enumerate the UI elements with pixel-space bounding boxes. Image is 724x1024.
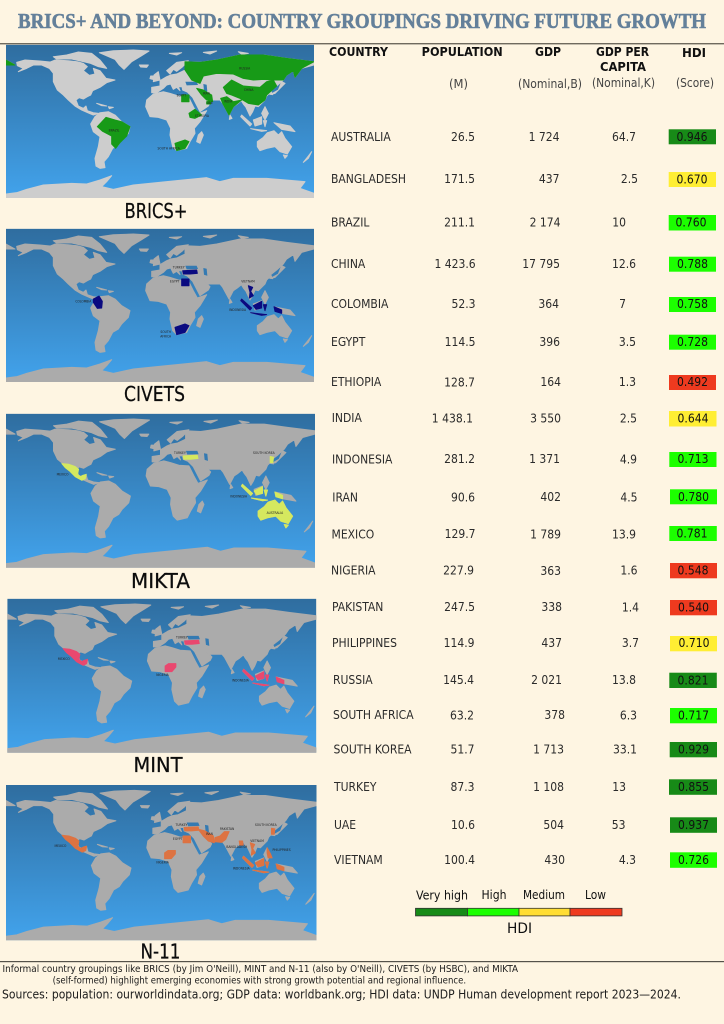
row: Vietnam: 4.3 xyxy=(619,853,636,867)
row: Indonesia: 4.9 xyxy=(620,452,637,466)
panel: N-11 map: NIGERIA xyxy=(156,860,170,864)
panel: MINT map: INDONESIA xyxy=(232,679,250,683)
row: Nigeria: 227.9 xyxy=(443,564,474,578)
text block: sources: Sources: population: ourworldindata.org; GDP data: worldbank.org; HDI data: UNDP Human development report 2023—2024. xyxy=(2,988,681,1002)
panel: MIKTA map: SOUTH KOREA xyxy=(253,451,276,455)
row: Brazil: 211.1 xyxy=(444,216,475,230)
row: Egypt: 3.5 xyxy=(619,335,636,349)
row: UAE: UAE xyxy=(334,818,356,832)
panel: CIVETS map: AFRICA xyxy=(160,334,172,338)
legend: HDI scale: Very high xyxy=(416,888,468,902)
panel: N-11 map: EGYPT xyxy=(173,837,183,841)
panel: BRICS+ map: SOUTH AFRICA xyxy=(157,146,181,150)
row: Turkey xyxy=(333,779,717,795)
row: India: 2.5 xyxy=(620,412,637,426)
row: Ethiopia xyxy=(331,375,716,390)
table header: (Score) xyxy=(676,76,714,90)
row: China: 1 423.6 xyxy=(434,257,476,271)
panel: N-11 map: VIETNAM xyxy=(250,839,264,843)
row: Colombia: COLOMBIA xyxy=(331,297,389,311)
row: Iran: IRAN xyxy=(332,490,358,504)
row: Brazil: BRAZIL xyxy=(331,216,369,230)
panel: MINT map: TURKEY xyxy=(176,636,188,640)
panel: BRICS+ map: IRAN xyxy=(203,91,210,95)
row: Mexico: MEXICO xyxy=(332,528,374,542)
row: Indonesia: 281.2 xyxy=(444,452,475,466)
row: Australia: 64.7 xyxy=(612,130,636,144)
row: Bangladesh: 2.5 xyxy=(621,172,638,186)
row: Nigeria: 363 xyxy=(540,564,561,578)
row: South Korea: 33.1 xyxy=(613,742,637,756)
row: Russia: 2 021 xyxy=(531,673,562,687)
panel: CIVETS map: EGYPT xyxy=(170,280,180,284)
row: Australia: 26.5 xyxy=(451,130,475,144)
row: Iran: 0.780 xyxy=(678,490,709,504)
panel: BRICS+ map: RUSSIA xyxy=(239,66,251,70)
row: Iran: 90.6 xyxy=(451,490,475,504)
panel: MINT map xyxy=(7,599,316,753)
row: Egypt: 114.5 xyxy=(445,335,476,349)
panel: MIKTA map xyxy=(6,414,315,568)
row: Australia: 0.946 xyxy=(677,130,708,144)
heading: N-11: N-11 xyxy=(140,940,180,964)
row: Australia: 1 724 xyxy=(529,130,560,144)
panel: N-11 map: BANGLADESH xyxy=(226,845,247,849)
panel: MIKTA map: MEXICO xyxy=(57,472,69,476)
table header: CAPITA xyxy=(600,60,647,74)
panel: N-11 map: PAKISTAN xyxy=(220,827,234,831)
row: Iran: 402 xyxy=(540,490,561,504)
panel: MINT map: MEXICO xyxy=(58,657,70,661)
row: South Korea xyxy=(334,742,717,757)
row: Bangladesh: 0.670 xyxy=(677,172,708,186)
table header: GDP PER xyxy=(596,45,650,59)
row: Turkey: 87.3 xyxy=(450,780,474,794)
row: Vietnam xyxy=(334,852,717,868)
row: UAE: 0.937 xyxy=(678,818,709,832)
row: India: 3 550 xyxy=(530,412,561,426)
row: South Africa: 0.717 xyxy=(678,708,709,722)
heading: BRICS+: BRICS+ xyxy=(124,199,188,223)
row: Colombia: 52.3 xyxy=(451,297,476,311)
row: China: 0.788 xyxy=(677,257,708,271)
row: India: 0.644 xyxy=(678,412,709,426)
row: Egypt: 0.728 xyxy=(677,335,708,349)
panel: N-11 map: SOUTH KOREA xyxy=(255,823,278,827)
row: Mexico: 129.7 xyxy=(445,527,476,541)
row: Nigeria: NIGERIA xyxy=(331,564,376,578)
panel: N-11 map: IRAN xyxy=(206,832,213,836)
panel: N-11 map: MEXICO xyxy=(54,844,67,848)
row: Iran: 4.5 xyxy=(620,490,638,504)
row: UAE xyxy=(334,817,717,833)
panel: MINT map: NIGERIA xyxy=(156,673,170,677)
legend: HDI scale: HDI xyxy=(507,921,532,937)
panel: CIVETS map xyxy=(6,229,314,382)
row: Nigeria xyxy=(331,563,717,578)
row: Ethiopia: 0.492 xyxy=(677,375,708,389)
row: Russia xyxy=(333,673,717,688)
panel: BRICS+ map: INDIA xyxy=(224,100,233,104)
table header: (Nominal,K) xyxy=(592,76,655,90)
row: Pakistan: 0.540 xyxy=(678,600,709,614)
legend: HDI scale xyxy=(416,888,622,937)
row: Philippines: 0.710 xyxy=(679,636,710,650)
panel: MIKTA map: TURKEY xyxy=(174,451,186,455)
row: Turkey: 13 xyxy=(612,780,626,794)
panel: N-11 map xyxy=(6,785,316,940)
table header: GDP xyxy=(535,45,561,59)
row: Brazil: 10 xyxy=(612,216,626,230)
row: Mexico: 0.781 xyxy=(677,526,707,540)
row: South Africa: 63.2 xyxy=(450,708,474,722)
row: Colombia: 364 xyxy=(538,297,559,311)
panel: CIVETS map: TURKEY xyxy=(173,266,185,270)
row: South Africa: 378 xyxy=(544,708,565,722)
panel: N-11 map: PHILIPPINES xyxy=(272,848,291,852)
row: South Africa: SOUTH AFRICA xyxy=(333,708,414,722)
row: Brazil: 0.760 xyxy=(676,216,707,230)
panel: BRICS+ map xyxy=(6,45,314,198)
row: Nigeria: 0.548 xyxy=(678,564,709,578)
panel: BRICS+ map: BRAZIL xyxy=(109,129,120,133)
row: Egypt xyxy=(331,335,716,350)
row: Philippines: PHILIPPINES xyxy=(332,636,397,650)
row: South Africa xyxy=(333,708,717,723)
row: Pakistan xyxy=(332,600,717,615)
table header xyxy=(329,45,714,91)
text block: description: (self-formed) highlight emerging economies with strong growth potential and regional influence. xyxy=(53,976,466,986)
panel: N-11 map: INDONESIA xyxy=(233,867,251,871)
panel: CIVETS map: SOUTH xyxy=(160,330,171,334)
panel: CIVETS map: COLOMBIA xyxy=(75,299,92,303)
row: Brazil: 2 174 xyxy=(530,216,561,230)
table header: (Nominal,B) xyxy=(518,77,582,91)
panel: MIKTA map: AUSTRALIA xyxy=(267,511,284,515)
row: Pakistan: 247.5 xyxy=(444,600,475,614)
row: UAE: 53 xyxy=(612,818,626,832)
row: Vietnam: VIETNAM xyxy=(334,853,383,867)
row: Vietnam: 430 xyxy=(544,853,565,867)
row: India: INDIA xyxy=(332,411,362,425)
row: Philippines: 114.9 xyxy=(444,636,475,650)
row: Colombia xyxy=(331,297,716,312)
legend: HDI scale: High xyxy=(482,888,506,902)
row: Colombia: 0.758 xyxy=(677,297,708,311)
row: Philippines: 3.7 xyxy=(622,636,639,650)
text block: description xyxy=(2,964,519,986)
panel: BRICS+ map: EGYPT xyxy=(177,94,186,98)
row: Vietnam: 0.726 xyxy=(678,853,709,867)
text block: description: Informal country groupings like BRICS (by Jim O'Neill), MINT and N-11 (also by O'Neill), CIVETS (by HSBC), and MIKTA xyxy=(2,964,519,975)
row: China: 12.6 xyxy=(612,257,636,271)
row: Russia: RUSSIA xyxy=(333,673,373,687)
row: Bangladesh: 437 xyxy=(539,172,560,186)
row: Pakistan: 1.4 xyxy=(622,600,639,614)
panel: CIVETS map: VIETNAM xyxy=(241,280,255,284)
panel: MIKTA map: INDONESIA xyxy=(230,494,248,498)
row: Bangladesh: 171.5 xyxy=(444,172,475,186)
row: South Korea: SOUTH KOREA xyxy=(334,742,412,756)
row: Australia xyxy=(331,129,716,144)
row: Nigeria: 1.6 xyxy=(620,564,638,578)
row: Ethiopia: 164 xyxy=(540,375,561,389)
heading: MIKTA: MIKTA xyxy=(131,569,190,593)
row: Indonesia: 0.713 xyxy=(678,452,708,466)
panel: N-11 map: TURKEY xyxy=(175,823,187,827)
row: South Africa: 6.3 xyxy=(620,708,637,722)
table header: HDI xyxy=(682,46,706,60)
row: Philippines: 437 xyxy=(541,636,562,650)
row: Indonesia: INDONESIA xyxy=(332,452,393,466)
row: South Korea: 1 713 xyxy=(533,742,564,756)
panel: BRICS+ map: CHINA xyxy=(244,88,254,92)
row: Australia: AUSTRALIA xyxy=(331,130,391,144)
legend: HDI scale: Low xyxy=(585,888,606,902)
row: UAE: 10.6 xyxy=(451,818,475,832)
row: China: CHINA xyxy=(331,257,366,271)
row: Russia: 0.821 xyxy=(678,674,708,688)
row: Turkey: 1 108 xyxy=(533,780,564,794)
row: Pakistan: 338 xyxy=(541,600,562,614)
row: Ethiopia: ETHIOPIA xyxy=(331,375,382,389)
row: Colombia: 7 xyxy=(619,297,626,311)
row: South Korea: 0.929 xyxy=(678,742,709,756)
row: Brazil xyxy=(331,215,716,230)
panel: BRICS+ map: UAE xyxy=(207,101,213,105)
row: Bangladesh: BANGLADESH xyxy=(331,172,406,186)
row: Egypt: 396 xyxy=(539,335,560,349)
table header: POPULATION xyxy=(422,45,503,59)
row: Turkey: 0.855 xyxy=(678,780,709,794)
row: Mexico: 13.9 xyxy=(612,528,636,542)
row: Turkey: TURKEY xyxy=(333,780,377,794)
row: Egypt: EGYPT xyxy=(331,335,366,349)
row: China xyxy=(331,257,716,272)
row: Mexico: 1 789 xyxy=(530,528,561,542)
table header: (M) xyxy=(449,77,468,91)
row: Philippines xyxy=(332,636,717,651)
row: Vietnam: 100.4 xyxy=(444,853,475,867)
row: India xyxy=(332,411,716,426)
row: Russia: 145.4 xyxy=(443,673,474,687)
row: China: 17 795 xyxy=(522,257,560,271)
row: Iran xyxy=(332,489,717,504)
table header: COUNTRY xyxy=(329,45,388,59)
legend: HDI scale: Medium xyxy=(523,888,565,902)
row: Russia: 13.8 xyxy=(612,673,636,687)
heading: MINT: MINT xyxy=(134,753,183,777)
row: Indonesia xyxy=(332,452,716,467)
row: Bangladesh xyxy=(331,172,716,187)
row: Indonesia: 1 371 xyxy=(529,452,560,466)
row: Pakistan: PAKISTAN xyxy=(332,600,383,614)
panel: BRICS+ map: ETHIOPIA xyxy=(195,114,210,118)
row: Mexico xyxy=(332,526,717,542)
row: India: 1 438.1 xyxy=(432,412,473,426)
row: UAE: 504 xyxy=(543,818,564,832)
heading: CIVETS: CIVETS xyxy=(124,382,185,406)
row: Ethiopia: 128.7 xyxy=(444,376,475,390)
row: South Korea: 51.7 xyxy=(450,742,474,756)
row: Ethiopia: 1.3 xyxy=(619,375,636,389)
panel: CIVETS map: INDONESIA xyxy=(229,308,247,312)
